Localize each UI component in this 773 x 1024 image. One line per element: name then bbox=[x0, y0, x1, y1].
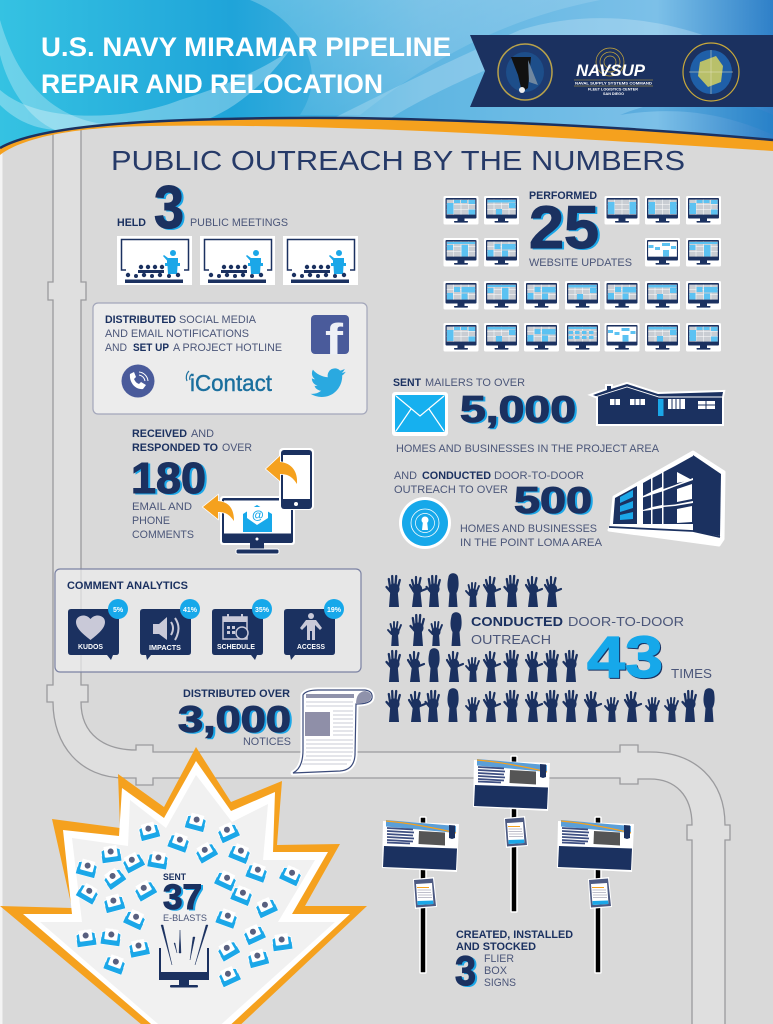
title: REPAIR AND RELOCATION bbox=[41, 69, 383, 99]
header banner bbox=[0, 0, 773, 155]
icon: envelope bbox=[392, 392, 448, 436]
stat: public meetings bbox=[117, 174, 358, 285]
stat: flier box signs: CREATED, INSTALLED bbox=[456, 929, 573, 941]
icon: twitter bbox=[310, 368, 346, 397]
stat: flier box signs bbox=[382, 756, 634, 994]
icons: raised hands bbox=[386, 573, 715, 722]
panel: social media: AND EMAIL NOTIFICATIONS bbox=[105, 328, 249, 340]
stat: comments received: 180 bbox=[131, 454, 206, 503]
stat: flier box signs: AND STOCKED bbox=[456, 941, 536, 953]
stat: comments received: AND bbox=[191, 428, 214, 440]
stat: flier box signs: SIGNS bbox=[484, 977, 516, 989]
bubble: schedule 35%: SCHEDULE bbox=[217, 644, 255, 651]
stat: door-to-door homes bbox=[394, 452, 724, 549]
icon: sign right bbox=[557, 817, 634, 973]
panel: social media: DISTRIBUTED bbox=[105, 314, 176, 326]
stat: door-to-door homes: HOMES AND BUSINESSES bbox=[460, 523, 597, 535]
stat: comments received: RESPONDED TO bbox=[132, 442, 218, 454]
bubble: kudos 5%: 5% bbox=[113, 607, 124, 614]
stat: notices: DISTRIBUTED OVER bbox=[183, 688, 290, 700]
stat: comments received: RECEIVED bbox=[132, 428, 187, 440]
bubble: kudos 5%: KUDOS bbox=[78, 644, 103, 651]
stat: notices: NOTICES bbox=[243, 736, 291, 748]
stat: website updates: WEBSITE UPDATES bbox=[529, 257, 632, 269]
icons: meeting rooms bbox=[117, 236, 358, 285]
icon: smartphone bbox=[279, 448, 314, 510]
icon: door lock bbox=[399, 497, 451, 549]
icon: facebook bbox=[311, 315, 349, 364]
stat: door-to-door times: DOOR-TO-DOOR bbox=[568, 614, 684, 629]
stat: website updates bbox=[444, 190, 721, 352]
stat: flier box signs: 3 bbox=[455, 947, 476, 994]
stat: mailers: HOMES AND BUSINESSES IN THE PROJECT AREA bbox=[396, 443, 660, 455]
panel: social media: AND bbox=[105, 342, 127, 354]
pipeline background bbox=[47, 125, 730, 1024]
icon: phone hotline bbox=[122, 364, 154, 398]
stat: door-to-door homes: AND bbox=[394, 470, 417, 482]
bubble: schedule 35% bbox=[212, 599, 272, 660]
logo ribbon bbox=[470, 35, 773, 107]
stat: website updates: PERFORMED bbox=[529, 190, 597, 202]
burst: e-blasts: E-BLASTS bbox=[163, 913, 207, 923]
logo: NAVSUP: SAN DIEGO bbox=[603, 92, 624, 96]
icons: flying emails bbox=[75, 812, 303, 987]
bubble: impacts 41%: IMPACTS bbox=[149, 645, 181, 652]
logo: Navy Region Southwest seal bbox=[683, 43, 739, 101]
icon: house bbox=[593, 384, 723, 424]
stat: door-to-door times: TIMES bbox=[671, 666, 712, 681]
stat: mailers bbox=[392, 377, 723, 455]
stat: mailers: MAILERS TO OVER bbox=[425, 377, 525, 389]
icon: apartment building bbox=[609, 452, 724, 545]
icon: monitor with rays bbox=[159, 925, 209, 988]
stat: public meetings: PUBLIC MEETINGS bbox=[190, 217, 288, 229]
stat: comments received: COMMENTS bbox=[132, 529, 194, 541]
logo: NAVSUP: FLEET LOGISTICS CENTER bbox=[588, 88, 639, 92]
stat: comments received bbox=[131, 428, 314, 554]
logo: NAVSUP: NAVSUP bbox=[576, 61, 646, 80]
icon: sign left bbox=[382, 817, 459, 973]
stat: website updates: 25 bbox=[529, 194, 599, 261]
stat: door-to-door times bbox=[386, 573, 715, 722]
icon: facebook: f bbox=[325, 315, 343, 364]
logo: NAVSUP bbox=[574, 48, 653, 96]
bubble: impacts 41%: 41% bbox=[183, 607, 198, 614]
stat: door-to-door homes: IN THE POINT LOMA AREA bbox=[460, 537, 603, 549]
panel: social media: SET UP bbox=[133, 342, 169, 354]
panel: comment analytics: COMMENT ANALYTICS bbox=[67, 580, 188, 592]
logo: iContact: iContact bbox=[190, 370, 273, 396]
main heading: PUBLIC OUTREACH BY THE NUMBERS bbox=[111, 145, 685, 176]
stat: comments received: OVER bbox=[222, 442, 252, 454]
panel: social media: SOCIAL MEDIA bbox=[179, 314, 257, 326]
stat: notices bbox=[178, 688, 372, 773]
logo: Naval Base Point Loma seal bbox=[498, 44, 552, 100]
arrow: phone reply bbox=[266, 456, 297, 484]
bubble: access 19%: 19% bbox=[327, 607, 342, 614]
burst: e-blasts: 37 bbox=[163, 878, 202, 917]
stat: door-to-door homes: OUTREACH TO OVER bbox=[394, 484, 508, 496]
arrow: email reply bbox=[203, 495, 234, 521]
bubble: access 19%: ACCESS bbox=[297, 644, 325, 651]
stat: mailers: SENT bbox=[393, 377, 421, 389]
stat: comments received: PHONE bbox=[132, 515, 170, 527]
panel: social media bbox=[93, 303, 367, 414]
stat: door-to-door times: OUTREACH bbox=[471, 632, 551, 647]
bubble: impacts 41% bbox=[140, 599, 200, 660]
panel: comment analytics bbox=[55, 569, 361, 672]
stat: door-to-door homes: 500 bbox=[514, 480, 592, 521]
stat: mailers: 5,000 bbox=[460, 389, 576, 430]
burst: e-blasts bbox=[0, 747, 367, 1024]
bubble: kudos 5% bbox=[68, 599, 128, 660]
stat: notices: 3,000 bbox=[178, 699, 291, 740]
burst: e-blasts: SENT bbox=[163, 872, 186, 882]
bubble: schedule 35%: 35% bbox=[255, 607, 270, 614]
wave: orange band with navy edge bbox=[0, 118, 773, 155]
stat: door-to-door times: 43 bbox=[587, 625, 663, 690]
stat: door-to-door homes: DOOR-TO-DOOR bbox=[494, 470, 584, 482]
icons: website monitors bbox=[444, 196, 721, 352]
title: U.S. NAVY MIRAMAR PIPELINE bbox=[41, 32, 451, 62]
logo: NAVSUP: NAVAL SUPPLY SYSTEMS COMMAND bbox=[575, 80, 652, 86]
icon: desktop monitor with email bbox=[220, 496, 295, 554]
bubble: access 19% bbox=[284, 599, 344, 660]
stat: door-to-door homes: CONDUCTED bbox=[422, 470, 491, 482]
stat: flier box signs: FLIER bbox=[484, 953, 514, 965]
stat: public meetings: HELD bbox=[117, 217, 146, 229]
stat: public meetings: 3 bbox=[154, 174, 184, 241]
icon: desktop monitor with email: @ bbox=[252, 508, 264, 522]
stat: comments received: EMAIL AND bbox=[132, 501, 192, 513]
stat: flier box signs: BOX bbox=[484, 965, 508, 977]
title bbox=[41, 32, 451, 99]
stat: door-to-door times: CONDUCTED bbox=[471, 614, 563, 629]
icon: sign center bbox=[473, 756, 550, 912]
icon: notice scroll bbox=[293, 690, 372, 773]
panel: social media: A PROJECT HOTLINE bbox=[173, 342, 282, 354]
